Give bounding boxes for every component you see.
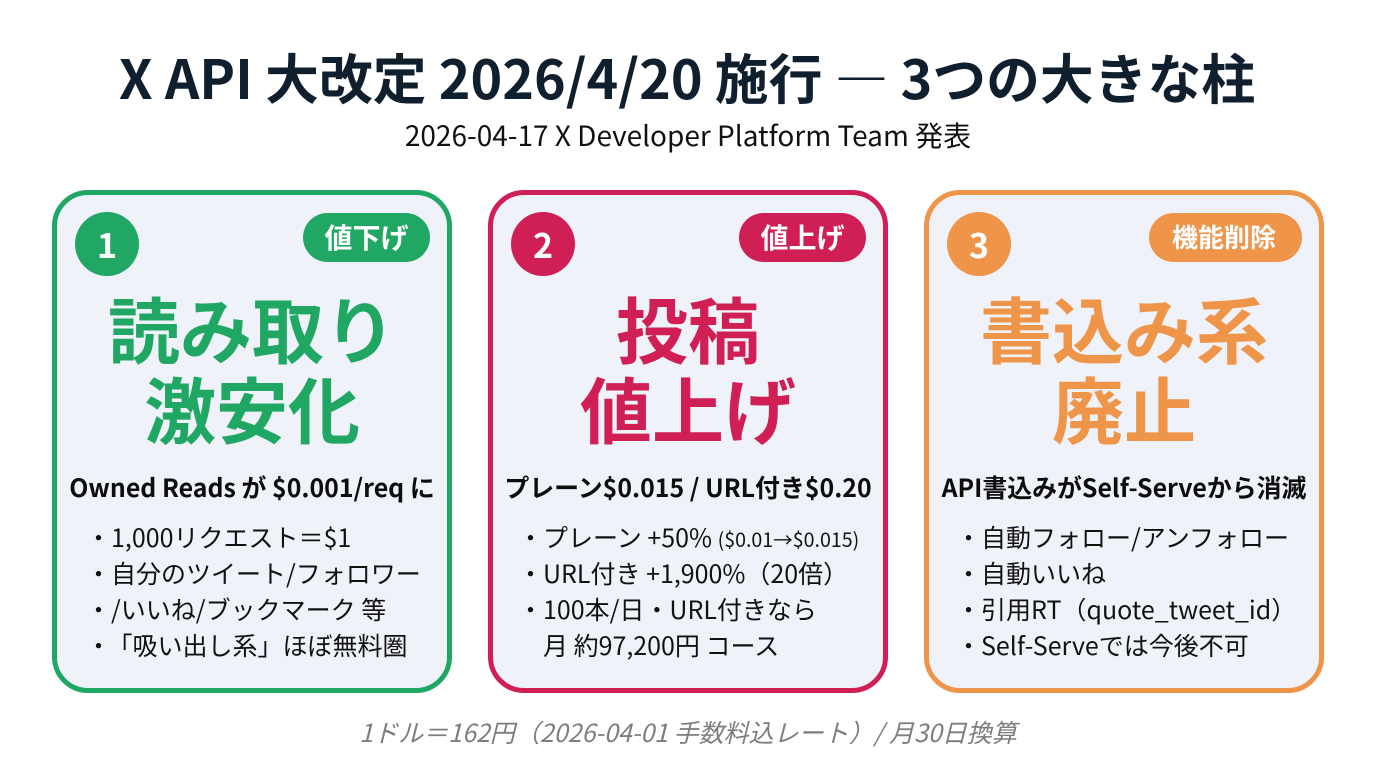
badge number 1 (75, 212, 139, 276)
heading: 書込み系廃止: 書込み系 (980, 274, 1268, 379)
tag: 値下げ (303, 213, 430, 262)
panel: 書込み系廃止 (924, 190, 1324, 693)
heading: 読み取り激安化: 読み取り (108, 274, 396, 379)
heading: 書込み系廃止: 廃止 (1052, 354, 1196, 459)
list: read details: ・ 「吸い出し系」ほぼ無料圏 (86, 627, 408, 663)
tag: 値上げ: 値上げ (760, 217, 844, 257)
list: read details: ・1,000リクエスト＝$1 (86, 519, 351, 555)
list: removed features: ・自動フォロー/アンフォロー (956, 519, 1289, 555)
list: removed features: ・引用RT（quote_tweet_id） (956, 591, 1296, 627)
subheading: plain and URL prices: プレーン$0.015 / URL付き$0.20 (504, 469, 872, 505)
list: removed features: ・自動いいね (956, 555, 1106, 591)
list: price details: ・プレーン +50% ($0.01→$0.015) (518, 519, 859, 555)
list: price details: ・URL付き +1,900%（20倍） (518, 555, 848, 591)
heading: 投稿値上げ (580, 274, 796, 459)
heading: 読み取り激安化: 激安化 (144, 354, 360, 459)
title: X API 大改定 2026/4/20 施行 — 3つの大きな柱 (119, 38, 1255, 115)
tag: 機能削除 (1149, 213, 1302, 262)
badge number 1: 1 (97, 219, 117, 268)
tag: 機能削除: 機能削除 (1172, 218, 1276, 255)
heading: 投稿値上げ: 投稿 (616, 274, 760, 379)
list: read details (86, 519, 421, 663)
badge number 3 (947, 212, 1011, 276)
heading: 書込み系廃止 (980, 274, 1268, 459)
panel: 投稿値上げ (488, 190, 888, 693)
subheading: Owned Reads: Owned Reads が $0.001/req に (69, 469, 435, 505)
subheading: API write removal: API書込みがSelf-Serveから消滅 (942, 469, 1306, 505)
heading: 投稿値上げ: 値上げ (580, 354, 796, 459)
list: read details: ・自分のツイート/フォロワー (86, 555, 421, 591)
list: removed features (956, 519, 1296, 663)
list: price details (518, 519, 859, 663)
list: price details: ・100本/日・URL付きなら (518, 591, 817, 627)
heading: 読み取り激安化 (108, 274, 396, 459)
badge number 2 (511, 212, 575, 276)
tag: 値下げ: 値下げ (324, 217, 408, 257)
footnote: 1ドル＝162円（2026-04-01 手数料込レート）/ 月30日換算 (359, 714, 1017, 750)
list: read details: ・/いいね/ブックマーク 等 (86, 591, 386, 627)
badge number 2: 2 (533, 219, 553, 268)
list: removed features: ・Self-Serveでは今後不可 (956, 627, 1249, 663)
subtitle: 2026-04-17 X Developer Platform Team 発表 (405, 115, 971, 155)
panel: 読み取り激安化 (52, 190, 452, 693)
tag: 値上げ (739, 213, 866, 262)
list: price details: 月 約97,200円 コース (543, 627, 779, 663)
badge number 3: 3 (969, 219, 989, 268)
